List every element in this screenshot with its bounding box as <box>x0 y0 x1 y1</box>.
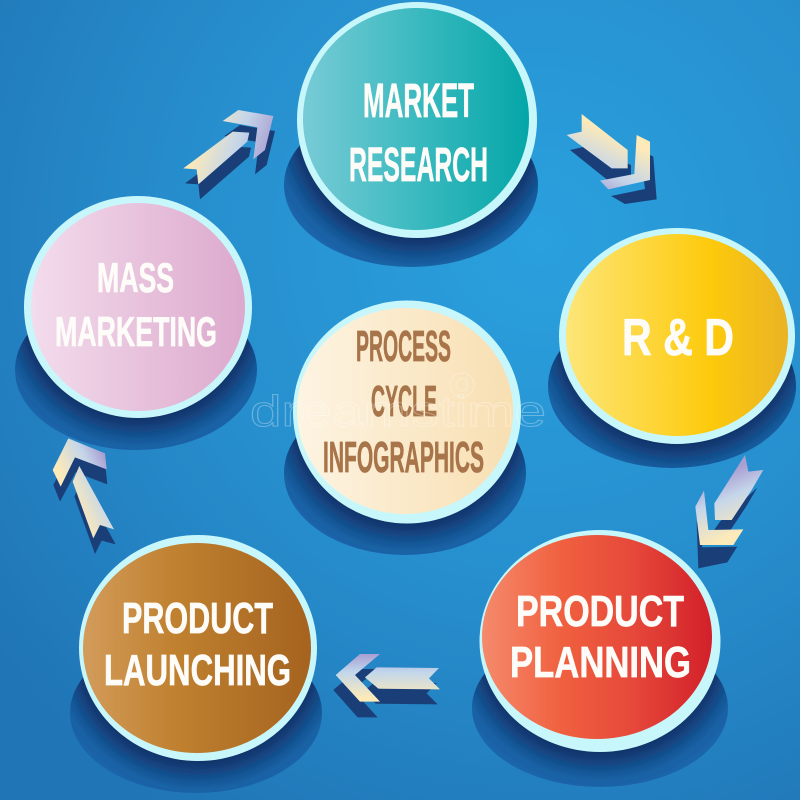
label: market research: MARKET <box>363 75 474 128</box>
arrow: market research to r and d <box>567 114 657 204</box>
label: market research <box>349 75 488 192</box>
label: product launching <box>104 594 291 695</box>
arrow: r and d to product planning <box>695 455 763 568</box>
label: mass marketing: MASS <box>97 254 174 301</box>
title: process cycle infographics <box>323 322 484 482</box>
label: mass marketing <box>55 254 217 355</box>
panel: market research <box>280 0 547 270</box>
arrow: mass marketing to market research <box>183 110 275 199</box>
arrow: product launching to mass marketing <box>53 438 116 554</box>
panel: center title <box>280 295 531 558</box>
label: product planning <box>510 587 691 687</box>
label: product planning: PRODUCT <box>516 587 684 636</box>
title: process cycle infographics: PROCESS <box>356 322 451 371</box>
arrow: product planning to product launching <box>333 654 440 717</box>
panel: product planning <box>468 524 732 791</box>
panel: r and d <box>540 222 800 472</box>
panel: product launching <box>66 529 327 796</box>
label: product launching: PRODUCT <box>122 594 273 643</box>
label: market research: RESEARCH <box>349 139 488 192</box>
watermark: dreamstime <box>250 387 546 436</box>
label: r and d: R & D <box>622 309 734 367</box>
label: mass marketing: MARKETING <box>55 308 217 355</box>
label: product launching: LAUNCHING <box>104 646 291 695</box>
watermark <box>250 373 546 436</box>
panel: mass marketing <box>10 190 262 455</box>
label: product planning: PLANNING <box>510 638 691 687</box>
panel: center title: INFOGRAPHICS <box>323 433 484 482</box>
title: process cycle infographics: CYCLE <box>371 377 437 426</box>
